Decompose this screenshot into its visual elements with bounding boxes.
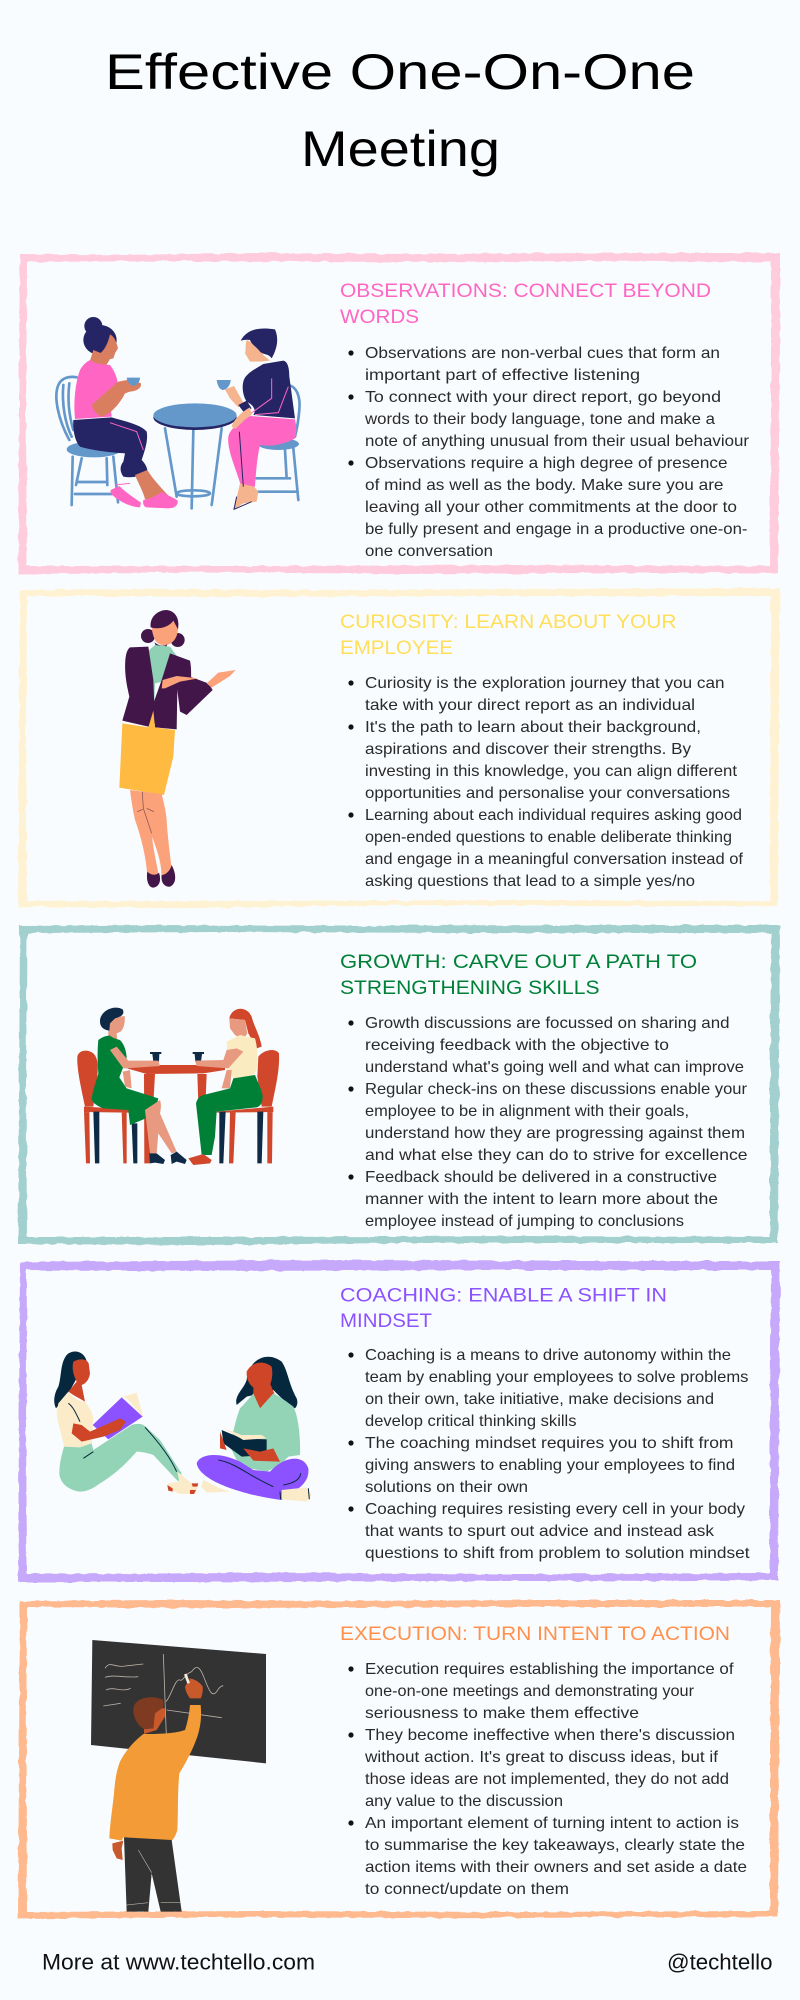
title <box>105 44 695 177</box>
bullet list: develop critical thinking skills <box>365 1413 576 1430</box>
bullet list: To connect with your direct report, go beyond <box>365 389 721 406</box>
illustration: two women reading <box>54 1352 312 1502</box>
bullet list: be fully present and engage in a productive one-on- <box>365 521 748 538</box>
bullet list: team by enabling your employees to solve problems <box>365 1369 748 1386</box>
bullet list <box>348 1347 750 1562</box>
bullet list: Observations require a high degree of presence <box>365 455 728 472</box>
bullet list: understand what's going well and what can improve <box>365 1059 744 1076</box>
bullet list: asking questions that lead to a simple yes/no <box>365 873 695 890</box>
bullet list: Coaching requires resisting every cell in your body <box>365 1501 745 1518</box>
heading: OBSERVATIONS: CONNECT BEYOND <box>340 280 711 302</box>
panel frame: pink brush border <box>18 253 780 574</box>
bullet list: one conversation <box>365 543 493 560</box>
bullet list: to connect/update on them <box>365 1881 569 1898</box>
heading <box>340 1284 667 1332</box>
bullet list: action items with their owners and set aside a date <box>365 1859 747 1876</box>
bullet list <box>348 345 750 560</box>
title: Meeting <box>301 121 500 177</box>
heading: MINDSET <box>340 1310 432 1332</box>
bullet list: giving answers to enabling your employees to find <box>365 1457 735 1474</box>
bullet list: It's the path to learn about their background, <box>365 719 701 736</box>
illustration: two women at a red table <box>77 1008 279 1165</box>
bullet list: The coaching mindset requires you to shift from <box>365 1435 734 1452</box>
bullet list <box>348 675 744 890</box>
bullet list: aspirations and discover their strengths. By <box>365 741 691 758</box>
illustration: woman presenting <box>119 610 236 888</box>
bullet list: opportunities and personalise your conversations <box>365 785 730 802</box>
bullet list: note of anything unusual from their usual behaviour <box>365 433 750 450</box>
bullet list: Regular check-ins on these discussions enable your <box>365 1081 748 1098</box>
bullet list: and engage in a meaningful conversation instead of <box>365 851 744 868</box>
panel frame: teal brush border <box>18 925 780 1245</box>
footer: social handle: @techtello <box>667 1950 772 1974</box>
heading <box>340 951 697 999</box>
panel frame: cream brush border <box>18 588 780 908</box>
bullet list: take with your direct report as an individual <box>365 697 695 714</box>
bullet list: words to their body language, tone and make a <box>364 411 715 428</box>
bullet list: questions to shift from problem to solution mindset <box>365 1545 750 1562</box>
bullet list <box>348 1015 748 1230</box>
bullet list <box>348 1661 747 1898</box>
heading: WORDS <box>340 306 419 328</box>
footer: website link: More at www.techtello.com <box>42 1950 315 1974</box>
bullet list: and what else they can do to strive for excellence <box>365 1147 748 1164</box>
heading: GROWTH: CARVE OUT A PATH TO <box>340 951 697 973</box>
heading <box>340 280 711 328</box>
illustration: man writing on a blackboard <box>91 1640 266 1912</box>
bullet list: Coaching is a means to drive autonomy within the <box>365 1347 731 1364</box>
bullet list: investing in this knowledge, you can align different <box>365 763 738 780</box>
heading: EMPLOYEE <box>340 637 453 659</box>
panel frame: orange brush border <box>18 1600 780 1919</box>
bullet list: one-on-one meetings and demonstrating your <box>365 1683 695 1700</box>
bullet list: solutions on their own <box>365 1479 528 1496</box>
bullet list: Learning about each individual requires asking good <box>365 807 742 824</box>
bullet list: any value to the discussion <box>365 1793 563 1810</box>
heading <box>340 611 676 659</box>
bullet list: receiving feedback with the objective to <box>365 1037 669 1054</box>
bullet list: employee instead of jumping to conclusions <box>365 1213 684 1230</box>
bullet list: Execution requires establishing the importance of <box>365 1661 734 1678</box>
panel: observations <box>18 253 780 574</box>
bullet list: open-ended questions to enable deliberate thinking <box>365 829 732 846</box>
illustration: two women at a cafe table <box>56 317 300 509</box>
heading: EXECUTION: TURN INTENT TO ACTION <box>340 1623 730 1645</box>
bullet list: An important element of turning intent to action is <box>365 1815 739 1832</box>
bullet list: those ideas are not implemented, they do not add <box>365 1771 729 1788</box>
bullet list: Observations are non-verbal cues that form an <box>365 345 720 362</box>
title: Effective One-On-One <box>105 44 695 100</box>
bullet list: Feedback should be delivered in a constructive <box>365 1169 717 1186</box>
heading: CURIOSITY: LEARN ABOUT YOUR <box>340 611 676 633</box>
bullet list: important part of effective listening <box>365 367 640 384</box>
bullet list: Curiosity is the exploration journey that you can <box>365 675 724 692</box>
bullet list: employee to be in alignment with their goals, <box>365 1103 689 1120</box>
bullet list: Growth discussions are focussed on sharing and <box>365 1015 730 1032</box>
heading: COACHING: ENABLE A SHIFT IN <box>340 1284 667 1306</box>
panel: execution <box>18 1600 780 1919</box>
bullet list: They become ineffective when there's discussion <box>365 1727 735 1744</box>
bullet list: that wants to spurt out advice and instead ask <box>365 1523 715 1540</box>
heading: STRENGTHENING SKILLS <box>340 977 600 999</box>
bullet list: to summarise the key takeaways, clearly state the <box>365 1837 745 1854</box>
bullet list: without action. It's great to discuss ideas, but if <box>364 1749 719 1766</box>
bullet list: seriousness to make them effective <box>365 1705 639 1722</box>
bullet list: on their own, take initiative, make decisions and <box>365 1391 714 1408</box>
panel frame: purple brush border <box>18 1260 780 1582</box>
panel: coaching <box>18 1260 780 1582</box>
panel: curiosity <box>18 588 780 908</box>
bullet list: of mind as well as the body. Make sure you are <box>365 477 724 494</box>
panel: growth <box>18 925 780 1245</box>
bullet list: leaving all your other commitments at the door to <box>365 499 737 516</box>
bullet list: understand how they are progressing against them <box>365 1125 745 1142</box>
bullet list: manner with the intent to learn more about the <box>365 1191 718 1208</box>
